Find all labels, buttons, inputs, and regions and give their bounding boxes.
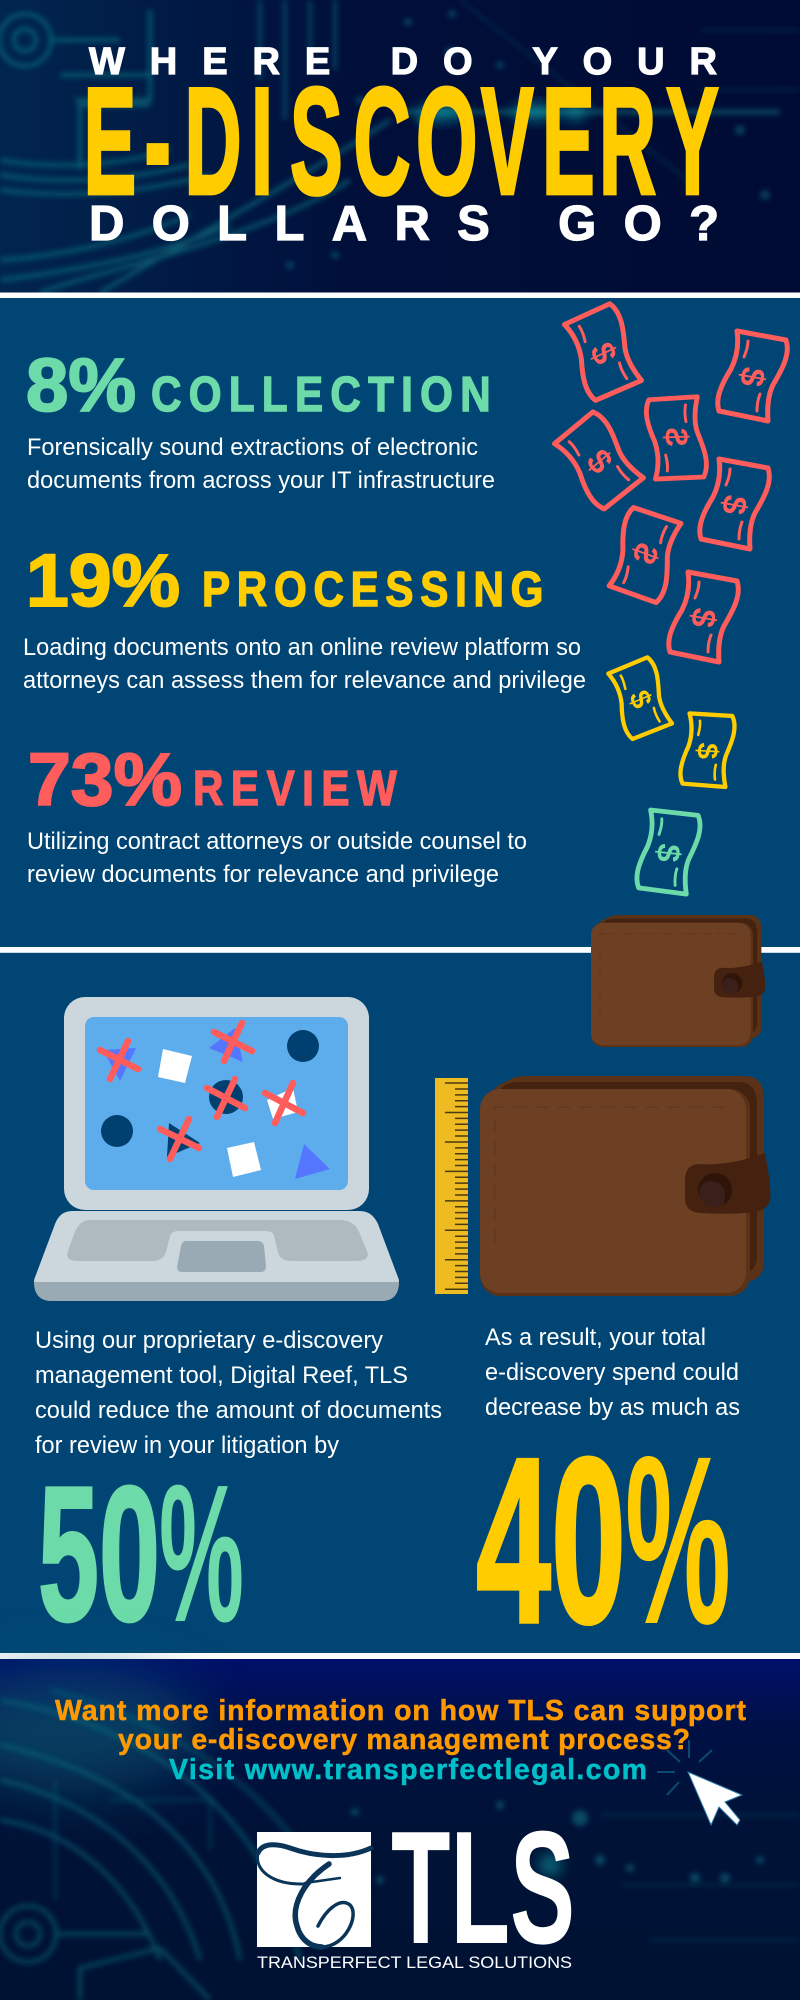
- panel: header: [0, 0, 800, 293]
- icon: red bill 6: [592, 498, 698, 611]
- logo: TRANSPERFECT LEGAL SOLUTIONS: [257, 1953, 572, 1972]
- stat: collection: Forensically sound extractions of electronic: [27, 435, 478, 461]
- stat: collection: documents from across your IT infrastructure: [27, 468, 495, 494]
- call to action: Visit www.transperfectlegal.com: [169, 1754, 647, 1786]
- icon: red bill 5: [700, 459, 769, 549]
- big number: 50%: 50: [38, 1446, 160, 1661]
- big number: 40%: 40: [476, 1409, 626, 1673]
- call to action: [55, 1695, 746, 1786]
- script monogram: [257, 1845, 371, 1947]
- text block: total spend: [485, 1325, 740, 1421]
- text block: total spend: e-discovery spend could: [485, 1360, 739, 1386]
- panel: savings: [34, 915, 770, 1674]
- icon: green bill: [632, 807, 705, 897]
- title line 2: E-DISCOVERY: [84, 55, 719, 226]
- icon: green bill: $: [650, 842, 688, 864]
- divider top: [0, 292, 800, 298]
- divider middle: [0, 947, 800, 953]
- icon: red bill 6: $: [624, 538, 666, 569]
- logo: TLS: [391, 1798, 575, 1978]
- panel: cost breakdown: [23, 296, 787, 897]
- icon: red bill 1: $: [582, 337, 624, 370]
- text block: reduce documents: could reduce the amount of documents: [35, 1398, 442, 1424]
- circuit pattern footer: [0, 1670, 200, 1790]
- text block: total spend: decrease by as much as: [485, 1395, 740, 1421]
- icon: red bill 4: $: [579, 442, 620, 481]
- text block: reduce documents: Using our proprietary e-discovery: [35, 1328, 383, 1354]
- stat: collection: COLLECTION: [151, 367, 491, 422]
- icon: large wallet: [480, 1076, 770, 1296]
- stat: review: 73%: [28, 738, 182, 821]
- title line 1: WHERE DO YOUR: [89, 41, 717, 83]
- stat: processing: 19%: [26, 539, 180, 622]
- stat: processing: [23, 539, 586, 694]
- icon: red bill 2: $: [732, 364, 772, 390]
- stat: review: review documents for relevance and privilege: [27, 862, 499, 888]
- stat: collection: [26, 343, 495, 494]
- icon: red bill 5: $: [714, 492, 754, 518]
- icon: yellow bill 2: [673, 708, 742, 792]
- icon: red bill 1: [549, 296, 657, 409]
- icon: yellow bill 1: [595, 650, 686, 747]
- panel: footer: [0, 1659, 800, 2000]
- icon: red bill 4: [542, 405, 656, 516]
- call to action: your e-discovery management process?: [118, 1724, 690, 1756]
- icon: red bill 7: [669, 572, 738, 662]
- panel: savings: %: [159, 1444, 244, 1663]
- icon: laptop: [34, 997, 399, 1301]
- icon: red bill 3: $: [658, 427, 696, 447]
- stat: collection: 8%: [26, 343, 136, 427]
- stat: review: REVIEW: [193, 761, 398, 816]
- stat: processing: Loading documents onto an online review platform so: [23, 635, 581, 661]
- stat: processing: PROCESSING: [202, 562, 543, 617]
- icon: yellow bill 2: $: [690, 742, 723, 760]
- icon: yellow bill 1: $: [622, 686, 658, 713]
- icon: ruler: [435, 1078, 468, 1294]
- icon: cursor: [657, 1740, 742, 1825]
- logo: [257, 1798, 575, 1978]
- icon: red bill 7: $: [683, 605, 723, 631]
- icon: small wallet: [591, 915, 765, 1047]
- icons: falling money: [542, 296, 787, 897]
- title line 3: DOLLARS GO?: [89, 197, 719, 251]
- stat: review: [27, 738, 527, 888]
- icon: red bill 2: [718, 331, 787, 421]
- icon: red bill 3: [637, 390, 716, 486]
- stat: review: Utilizing contract attorneys or outside counsel to: [27, 829, 527, 855]
- circuit pattern header: [0, 0, 800, 293]
- call to action: Want more information on how TLS can support: [55, 1695, 746, 1727]
- text block: reduce documents: [35, 1328, 442, 1459]
- text block: total spend: As a result, your total: [485, 1325, 706, 1351]
- text block: reduce documents: for review in your litigation by: [35, 1433, 339, 1459]
- divider bottom: [0, 1653, 800, 1659]
- stat: processing: attorneys can assess them for relevance and privilege: [23, 668, 586, 694]
- text block: reduce documents: management tool, Digital Reef, TLS: [35, 1363, 408, 1389]
